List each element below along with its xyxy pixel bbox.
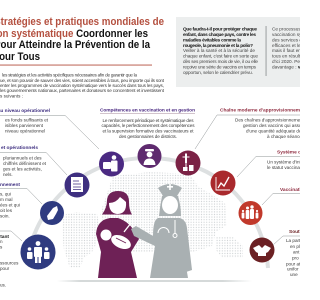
- question text: dès ses premiers mois de vie, il ou elle: [183, 59, 258, 64]
- callout: operational funding: niveau opérationnel: [5, 128, 45, 134]
- ground line: [57, 280, 252, 282]
- process text: [272, 27, 320, 69]
- node: chart icon: [210, 170, 236, 196]
- callout: operational funding: es fonds suffisants et: [5, 118, 49, 122]
- figure: mother and baby: [96, 191, 139, 278]
- callout: operational funding: [0, 108, 99, 149]
- callout: operational plans: nels.: [3, 172, 13, 177]
- callout: support: pour at: [286, 262, 300, 266]
- icon: baby: [100, 230, 133, 252]
- callout: information system: [237, 150, 320, 177]
- node: team icon: [20, 234, 56, 270]
- arc linking strategies: [27, 158, 268, 268]
- callout: operational funding: isibles parviennent: [5, 123, 44, 128]
- callout: leadership: n: [0, 239, 3, 244]
- question text: rougeole, la pneumonie et la polio?: [183, 43, 253, 48]
- callout: skills and management: et la supervision formative des vaccinateurs et: [102, 129, 194, 134]
- node: vaccine icon: [176, 150, 200, 176]
- callout: support: [273, 229, 307, 277]
- intro text: les stratégies et les activités spécifiques nécessaires afin de garantir que la: [2, 73, 137, 78]
- node: hand icon: [40, 201, 64, 225]
- question text: reçoive une série de vaccins en temps: [183, 64, 257, 69]
- callout: operational plans: pluriannuels et des: [3, 156, 42, 160]
- panel: question: [176, 17, 320, 87]
- question text: enfant, dans chaque pays, contre les: [183, 32, 256, 37]
- callout: community engagement: s, qui: [0, 192, 11, 196]
- callout: leadership: us.: [0, 282, 6, 288]
- question text: Veiller à la santé et à la sécurité de: [183, 48, 255, 53]
- callout: support: ant: [293, 250, 300, 254]
- node: family icon: [238, 201, 262, 225]
- node: document icon: [64, 172, 90, 198]
- intro text: enter les programmes de vaccination systématique vers le succès dans tous les pays,: [0, 83, 164, 88]
- question text: chaque enfant, c'est faire en sorte que: [183, 54, 258, 59]
- callout: skills and management: capacités, le perfectionnement des compétences: [102, 123, 195, 128]
- callout: community engagement: m mal: [0, 197, 13, 202]
- node: support icon: [250, 238, 274, 262]
- callout: skills and management: des gestionnaires de districts.: [119, 134, 177, 139]
- question text: opportun, selon le calendrier prévu.: [183, 70, 253, 75]
- callout: leadership: s: [0, 244, 3, 250]
- callout: community engagement: oit les: [0, 208, 13, 213]
- callout: information system: le statut vaccinal: [267, 165, 300, 170]
- title rule: [0, 64, 152, 66]
- callout: support: une: [290, 272, 298, 277]
- panel divider: [265, 26, 268, 76]
- callout: support: pro: [292, 256, 299, 260]
- callout: vaccination for all: [262, 187, 307, 205]
- callout: supply chain: [195, 108, 320, 149]
- intro text: [0, 73, 165, 98]
- question text: [183, 27, 258, 75]
- node: planning icon: [99, 152, 124, 176]
- callout: skills and management: Le renforcement périodique et systématique des: [102, 118, 194, 123]
- figure: nurse: [131, 184, 192, 278]
- callout: operational plans: [0, 145, 67, 177]
- callout: skills and management: Compétences en vaccination et en gestion: [100, 108, 195, 114]
- callout: support: unifor: [287, 266, 299, 272]
- callout: community engagement: [0, 182, 42, 218]
- callout: leadership: ssources: [0, 260, 19, 266]
- world map dots: [62, 172, 243, 268]
- callout: skills and management: [100, 108, 195, 139]
- callout: community engagement: soin.: [0, 213, 10, 218]
- callout: leadership: pour: [0, 266, 10, 271]
- callout: operational plans: chiffrés définissent et: [3, 161, 47, 166]
- node: health worker icon: [138, 144, 162, 168]
- callout: leadership: [0, 231, 22, 288]
- callout: community engagement: ées et qui: [0, 202, 20, 207]
- intro text: les gouvernements nationaux, partenaires et donateurs se concentrent et investissent: [0, 88, 165, 93]
- question text: maladies évitables comme la: [183, 37, 241, 42]
- intro text: ue, et son pouvoir de sauver des vies, soient accessibles à tous, peu importe qui ils sont: [0, 78, 165, 83]
- callout: operational plans: ges et les activités,: [3, 166, 42, 172]
- question text: Que faudra-t-il pour protéger chaque: [183, 27, 257, 32]
- callout: support: en pl: [290, 244, 300, 249]
- title: [0, 16, 164, 63]
- intro text: s suivants :: [0, 93, 23, 98]
